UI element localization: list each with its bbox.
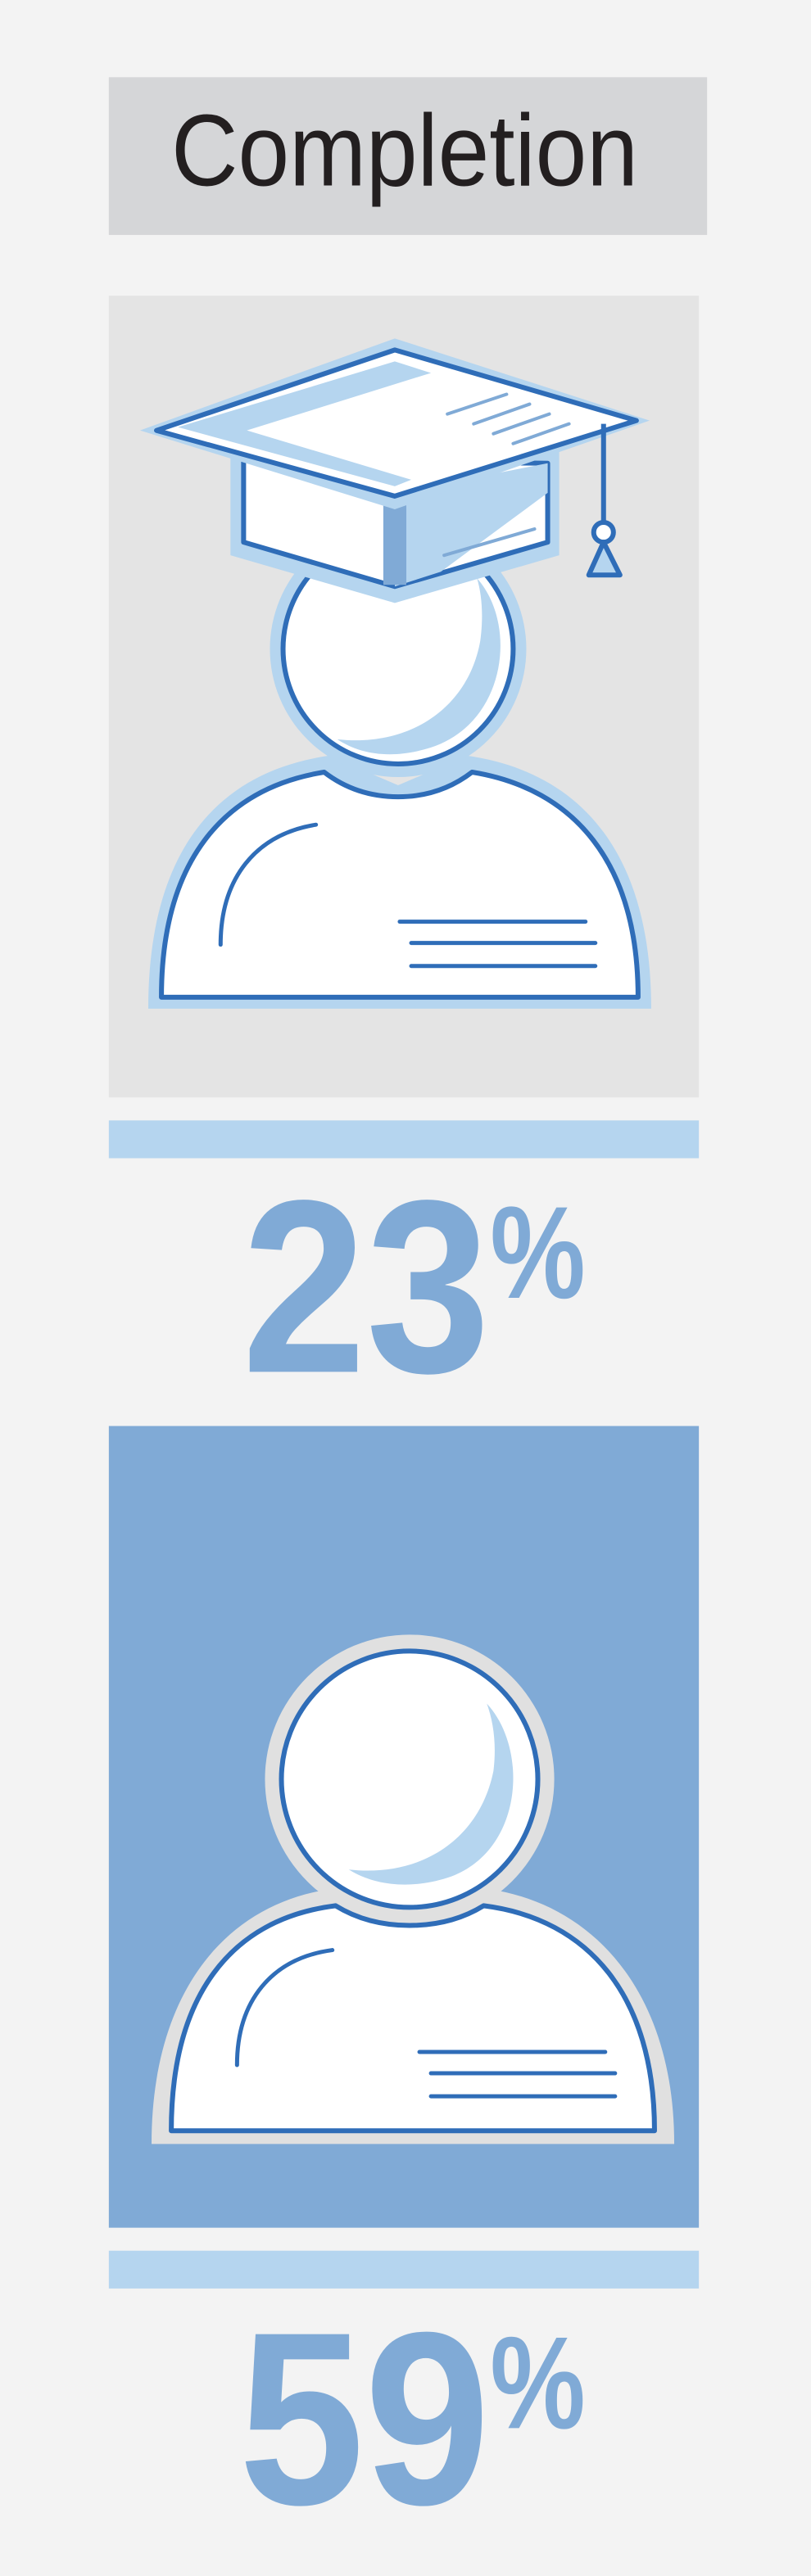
icon: graduate person xyxy=(140,338,651,1009)
icon: person xyxy=(152,1634,674,2144)
title: Completion xyxy=(171,94,638,208)
panel: non-graduate xyxy=(109,1426,699,2228)
stat: 59%: 59 xyxy=(238,2281,490,2556)
bar: graduate xyxy=(109,1120,699,1158)
stat: 59%: % xyxy=(490,2310,586,2456)
stat: 23%: % xyxy=(490,1180,586,1326)
panel: graduate xyxy=(109,296,699,1097)
icon: cap xyxy=(230,452,560,603)
stat: 23%: 23 xyxy=(242,1149,490,1424)
title xyxy=(109,77,707,235)
bar: non-graduate xyxy=(109,2251,699,2289)
